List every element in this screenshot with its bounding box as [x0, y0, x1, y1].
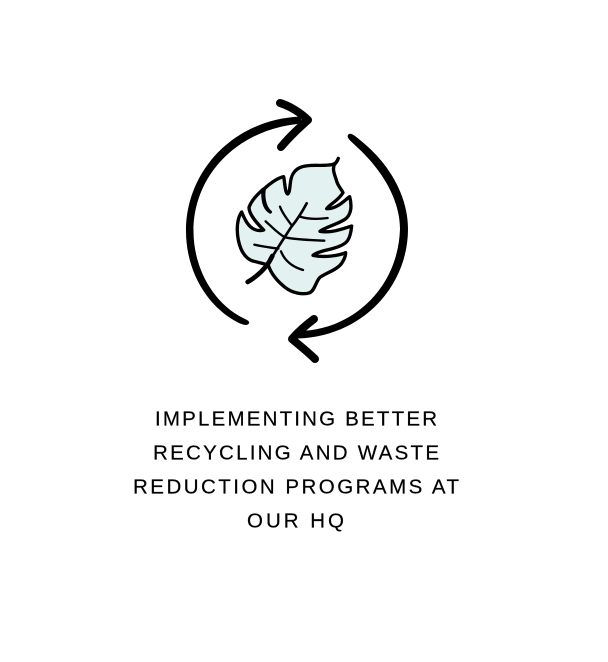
- text block: caption: OUR HQ: [247, 510, 344, 532]
- leaf fill and outline: [237, 158, 352, 294]
- icon: monstera leaf: [237, 158, 352, 294]
- leaf midrib: [272, 203, 307, 257]
- arrow: top-left circular arrow: [186, 103, 308, 325]
- arrow: bottom-right circular arrow: [292, 134, 408, 359]
- icon: recycling leaf: [186, 103, 408, 359]
- leaf veins: [254, 207, 328, 270]
- text block: caption: RECYCLING AND WASTE: [153, 442, 439, 464]
- text block: caption: IMPLEMENTING BETTER: [155, 408, 437, 430]
- text block: caption: [133, 408, 459, 532]
- text block: caption: REDUCTION PROGRAMS AT: [133, 476, 459, 498]
